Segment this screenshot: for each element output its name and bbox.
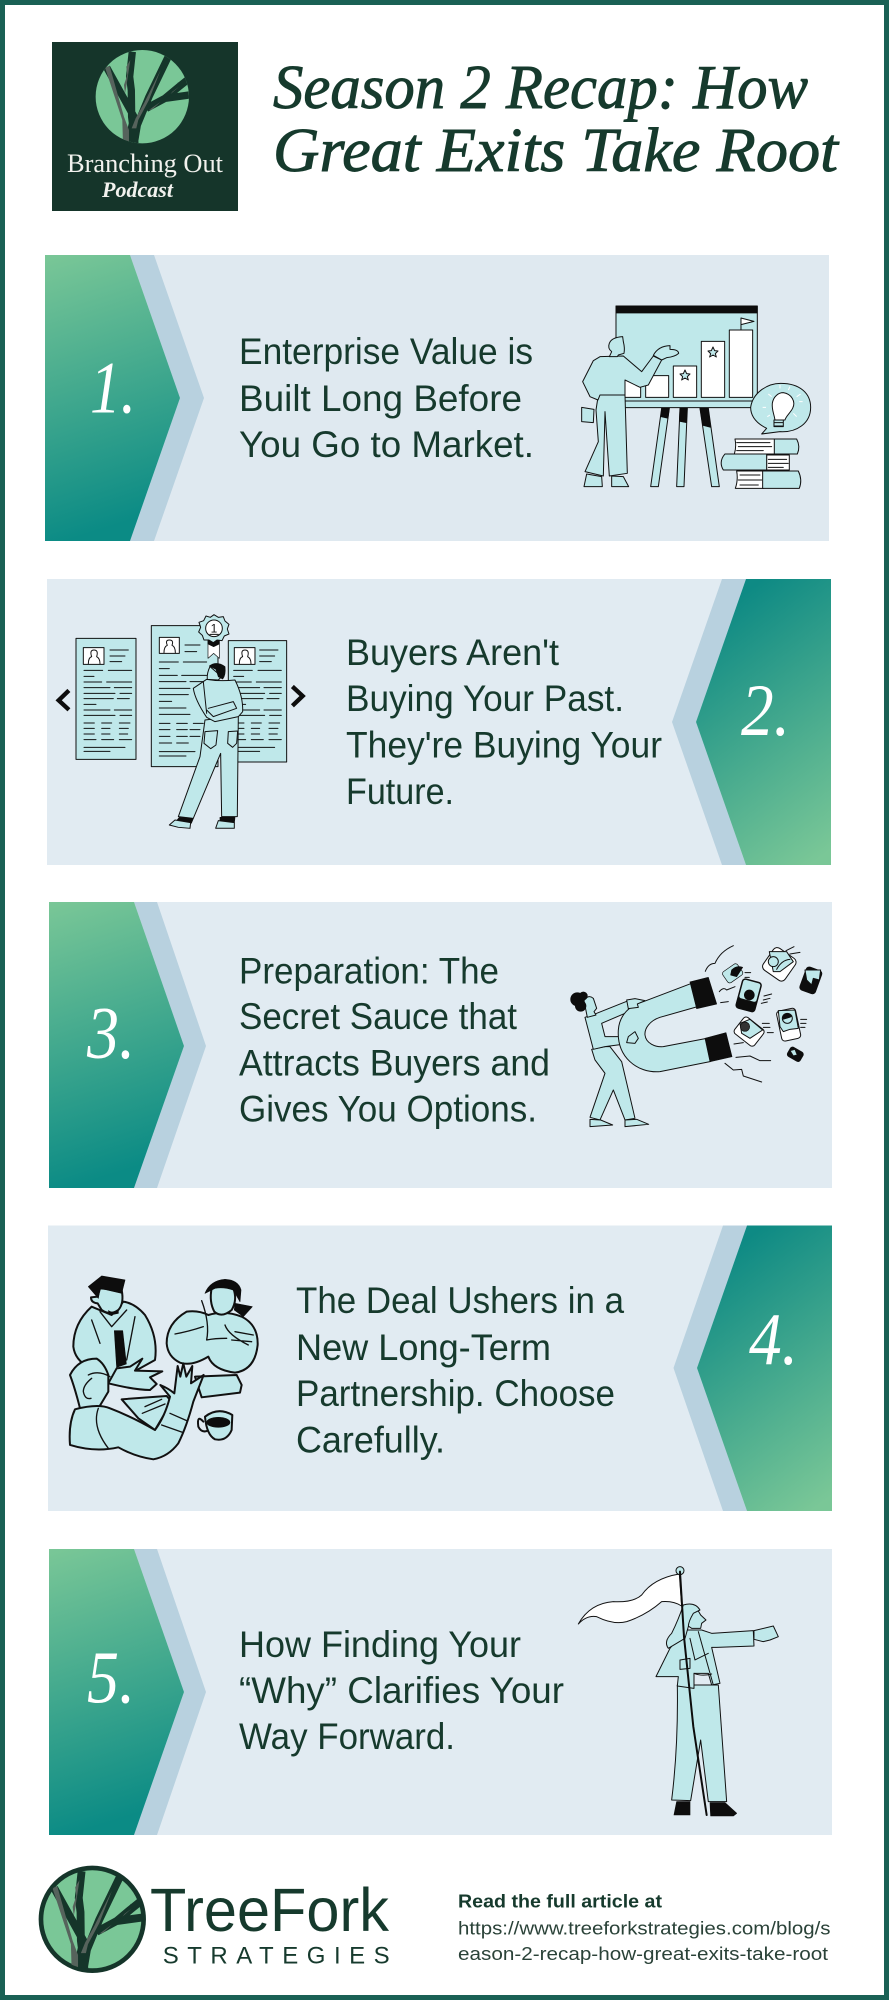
green arrow <box>49 1549 184 1835</box>
text 5: “Why” Clarifies Your <box>239 1670 564 1711</box>
text 4: Partnership. Choose <box>296 1373 615 1414</box>
text 2: Buying Your Past. <box>346 678 624 719</box>
article link: eason-2-recap-how-great-exits-take-root <box>458 1943 828 1964</box>
text 1: Enterprise Value is <box>239 331 533 372</box>
number 2: 2. <box>741 670 790 752</box>
text 3: Gives You Options. <box>239 1089 537 1130</box>
arrow band <box>130 255 204 541</box>
number 4: 4. <box>749 1299 798 1381</box>
arrow band <box>674 1226 747 1511</box>
panel 1 <box>45 255 829 541</box>
text 3: Attracts Buyers and <box>239 1042 550 1084</box>
title: Great Exits Take Root <box>273 117 840 185</box>
number 5: 5. <box>87 1638 135 1720</box>
panel 3 <box>49 902 832 1188</box>
text 2: Future. <box>346 771 454 812</box>
text 2: They're Buying Your <box>346 724 662 766</box>
icon: woman with flag <box>578 1567 778 1816</box>
text 5: Way Forward. <box>239 1716 455 1757</box>
panel 2 <box>47 579 831 865</box>
footer tree mark <box>41 1868 144 1973</box>
logo name: Branching Out <box>67 149 224 178</box>
green arrow <box>49 902 184 1188</box>
text 4: The Deal Ushers in a <box>296 1280 624 1321</box>
article link <box>458 1891 830 1964</box>
text 5: How Finding Your <box>239 1624 521 1665</box>
number 1: 1. <box>90 348 136 430</box>
title: Season 2 Recap: How <box>273 54 808 122</box>
text 3 <box>239 951 550 1130</box>
panel 4 <box>48 1226 832 1511</box>
green arrow <box>45 255 180 541</box>
wordmark subline: STRATEGIES <box>163 1942 390 1969</box>
panel 5 <box>49 1549 832 1835</box>
icon: man reviewing resumes <box>59 615 303 828</box>
logo subtitle: Podcast <box>101 177 174 202</box>
text 5 <box>239 1624 564 1757</box>
article link: https://www.treeforkstrategies.com/blog/s <box>458 1918 830 1939</box>
text 4 <box>296 1280 624 1460</box>
icon: three people meeting <box>70 1276 258 1459</box>
arrow band <box>134 1549 206 1835</box>
green arrow <box>697 1226 832 1511</box>
text 2 <box>346 632 662 812</box>
wordmark: TreeFork <box>150 1876 389 1944</box>
text 1: You Go to Market. <box>239 424 534 465</box>
icon: person pulling with magnet <box>571 946 823 1127</box>
podcast logo <box>52 42 238 211</box>
article link: Read the full article at <box>458 1891 662 1912</box>
text 1: Built Long Before <box>239 378 522 419</box>
text 1 <box>239 331 534 465</box>
icon: man reviewing resumes: 1 <box>211 622 218 636</box>
text 3: Preparation: The <box>239 951 499 992</box>
text 2: Buyers Aren't <box>346 632 560 673</box>
icon: presenter with chart <box>582 306 811 488</box>
arrow band <box>134 902 206 1188</box>
text 4: Carefully. <box>296 1420 445 1460</box>
logo tree mark <box>96 50 189 147</box>
number 3: 3. <box>86 993 135 1075</box>
text 4: New Long-Term <box>296 1327 551 1368</box>
title <box>273 54 840 185</box>
text 3: Secret Sauce that <box>239 996 518 1037</box>
footer logo <box>41 1868 390 1973</box>
green arrow <box>696 579 831 865</box>
arrow band <box>672 579 746 865</box>
